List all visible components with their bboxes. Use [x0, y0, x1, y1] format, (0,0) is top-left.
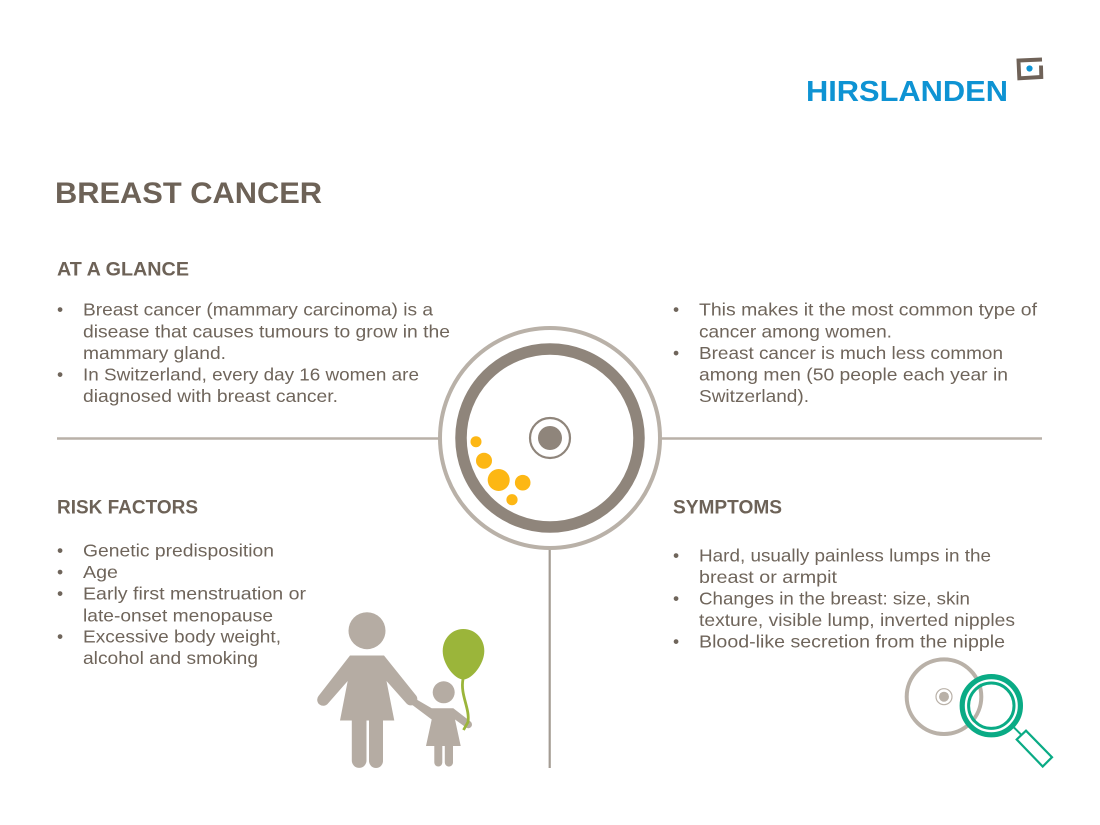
- heading: at a glance: AT A GLANCE: [57, 260, 189, 280]
- text block: risk factors: •: [57, 540, 63, 560]
- central breast diagram: [440, 328, 660, 548]
- text block: risk factors: alcohol and smoking: [83, 648, 258, 668]
- text block: at a glance right: among men (50 people each year in: [699, 364, 1008, 384]
- text block: at a glance left: mammary gland.: [83, 343, 226, 363]
- text block: risk factors: •: [57, 584, 63, 604]
- text block: risk factors: Age: [83, 562, 118, 582]
- text block: at a glance left: •: [57, 300, 63, 320]
- text block: at a glance right: [673, 300, 1037, 406]
- text block: risk factors: Early first menstruation or: [83, 584, 306, 604]
- heading: risk factors: RISK FACTORS: [57, 498, 198, 518]
- text block: at a glance left: In Switzerland, every day 16 women are: [83, 364, 419, 384]
- text block: at a glance left: Breast cancer (mammary carcinoma) is a: [83, 300, 433, 320]
- mother: [317, 612, 417, 768]
- text block: symptoms: Changes in the breast: size, skin: [699, 588, 970, 608]
- text block: at a glance left: •: [57, 364, 63, 384]
- icon: mother and child with balloon: [317, 612, 484, 768]
- text block: at a glance right: •: [673, 300, 679, 320]
- tumour dots: [470, 436, 530, 505]
- text block: symptoms: texture, visible lump, inverted nipples: [699, 610, 1015, 630]
- logo wordmark: HIRSLANDEN: [806, 76, 1008, 108]
- text block: risk factors: [57, 540, 306, 668]
- icon: breast under magnifying glass: [907, 659, 1052, 766]
- text block: symptoms: Hard, usually painless lumps in the: [699, 546, 991, 566]
- magnifier: [962, 677, 1052, 766]
- logo icon: [1018, 60, 1042, 78]
- title: BREAST CANCER: [55, 177, 322, 210]
- text block: at a glance right: cancer among women.: [699, 322, 892, 342]
- text block: at a glance left: [57, 300, 450, 406]
- text block: symptoms: •: [673, 546, 679, 566]
- balloon: [443, 629, 484, 730]
- text block: symptoms: Blood-like secretion from the nipple: [699, 632, 1005, 652]
- text block: at a glance right: •: [673, 343, 679, 363]
- text block: risk factors: Excessive body weight,: [83, 626, 281, 646]
- child: [411, 681, 472, 767]
- text block: symptoms: [673, 546, 1015, 652]
- text block: risk factors: late-onset menopause: [83, 606, 273, 626]
- text block: risk factors: •: [57, 626, 63, 646]
- logo: Hirslanden: [806, 60, 1042, 108]
- text block: at a glance right: Switzerland).: [699, 386, 809, 406]
- text block: symptoms: •: [673, 588, 679, 608]
- text block: symptoms: breast or armpit: [699, 567, 837, 587]
- text block: risk factors: Genetic predisposition: [83, 540, 274, 560]
- text block: symptoms: •: [673, 632, 679, 652]
- text block: risk factors: •: [57, 562, 63, 582]
- text block: at a glance right: Breast cancer is much less common: [699, 343, 1003, 363]
- heading: symptoms: SYMPTOMS: [673, 498, 782, 518]
- text block: at a glance left: diagnosed with breast cancer.: [83, 386, 338, 406]
- text block: at a glance left: disease that causes tumours to grow in the: [83, 322, 450, 342]
- text block: at a glance right: This makes it the most common type of: [699, 300, 1037, 320]
